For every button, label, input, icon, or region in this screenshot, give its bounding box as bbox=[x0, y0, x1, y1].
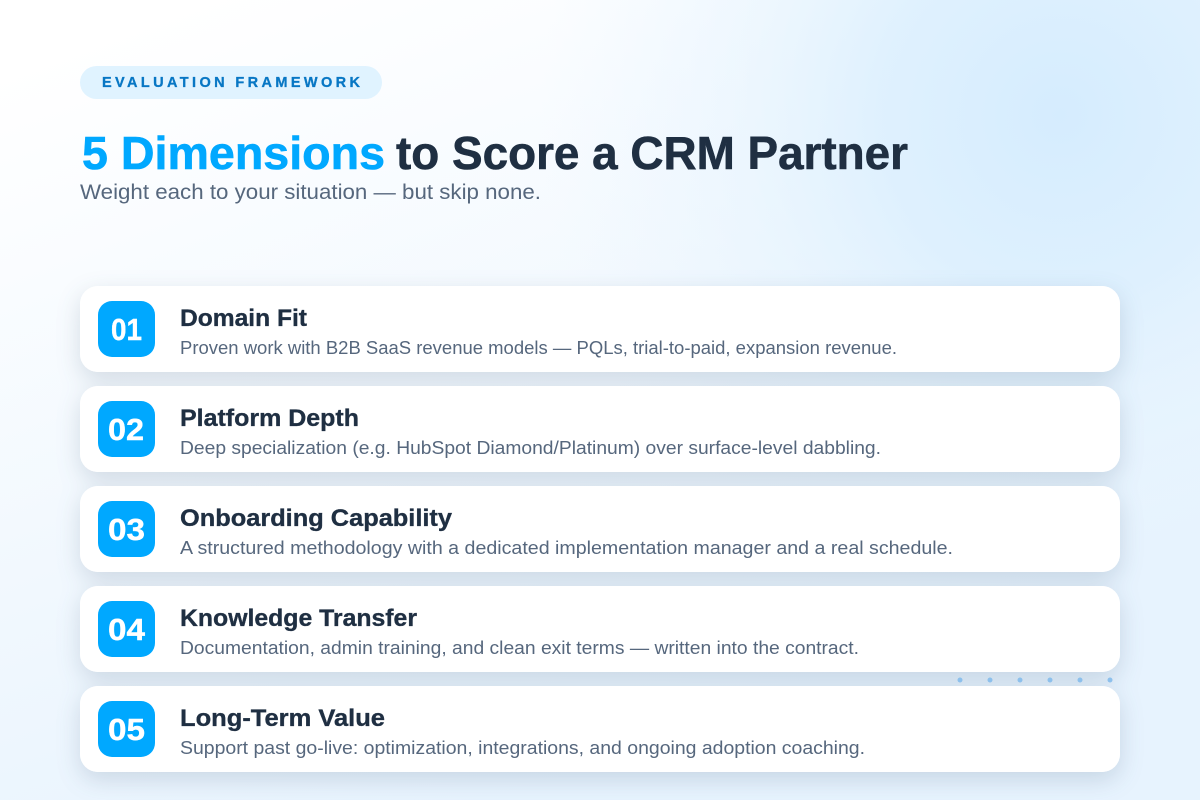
description 03: A structured methodology with a dedicated implementation manager and a real schedule. bbox=[180, 538, 953, 558]
badge 02: 02 bbox=[108, 412, 144, 447]
description 02: Deep specialization (e.g. HubSpot Diamond/Platinum) over surface-level dabbling. bbox=[180, 438, 881, 458]
dot row bbox=[958, 678, 1112, 682]
card 04: Knowledge Transfer bbox=[80, 586, 1120, 672]
card 01: Domain Fit bbox=[80, 286, 1120, 372]
description 05: Support past go-live: optimization, integrations, and ongoing adoption coaching. bbox=[180, 738, 865, 758]
badge 03 bbox=[98, 501, 155, 557]
badge 04: 04 bbox=[108, 612, 146, 647]
card 05: Long-Term Value bbox=[80, 686, 1120, 772]
badge 01 bbox=[98, 301, 155, 357]
title: 5 Dimensions bbox=[82, 127, 385, 179]
eyebrow pill: EVALUATION FRAMEWORK bbox=[102, 75, 361, 91]
heading: Onboarding Capability: Onboarding Capability bbox=[180, 505, 452, 532]
title: to Score a CRM Partner bbox=[396, 127, 908, 179]
badge 02 bbox=[98, 401, 155, 457]
badge 03: 03 bbox=[108, 512, 145, 547]
badge 05: 05 bbox=[108, 712, 145, 747]
heading: Long-Term Value: Long-Term Value bbox=[180, 705, 385, 732]
card 02: Platform Depth bbox=[80, 386, 1120, 472]
badge 04 bbox=[98, 601, 155, 657]
badge 01: 01 bbox=[111, 312, 142, 347]
heading: Domain Fit: Domain Fit bbox=[180, 305, 307, 332]
eyebrow pill bbox=[80, 66, 382, 99]
card shadows bbox=[80, 286, 1120, 772]
title bbox=[82, 127, 908, 179]
description 04: Documentation, admin training, and clean exit terms — written into the contract. bbox=[180, 638, 859, 658]
heading: Knowledge Transfer: Knowledge Transfer bbox=[180, 605, 417, 632]
description 01: Proven work with B2B SaaS revenue models — PQLs, trial-to-paid, expansion revenue. bbox=[180, 338, 897, 358]
subtitle: Weight each to your situation — but skip none. bbox=[80, 181, 541, 204]
heading: Platform Depth: Platform Depth bbox=[180, 405, 359, 432]
badge 05 bbox=[98, 701, 155, 757]
card 03: Onboarding Capability bbox=[80, 486, 1120, 572]
